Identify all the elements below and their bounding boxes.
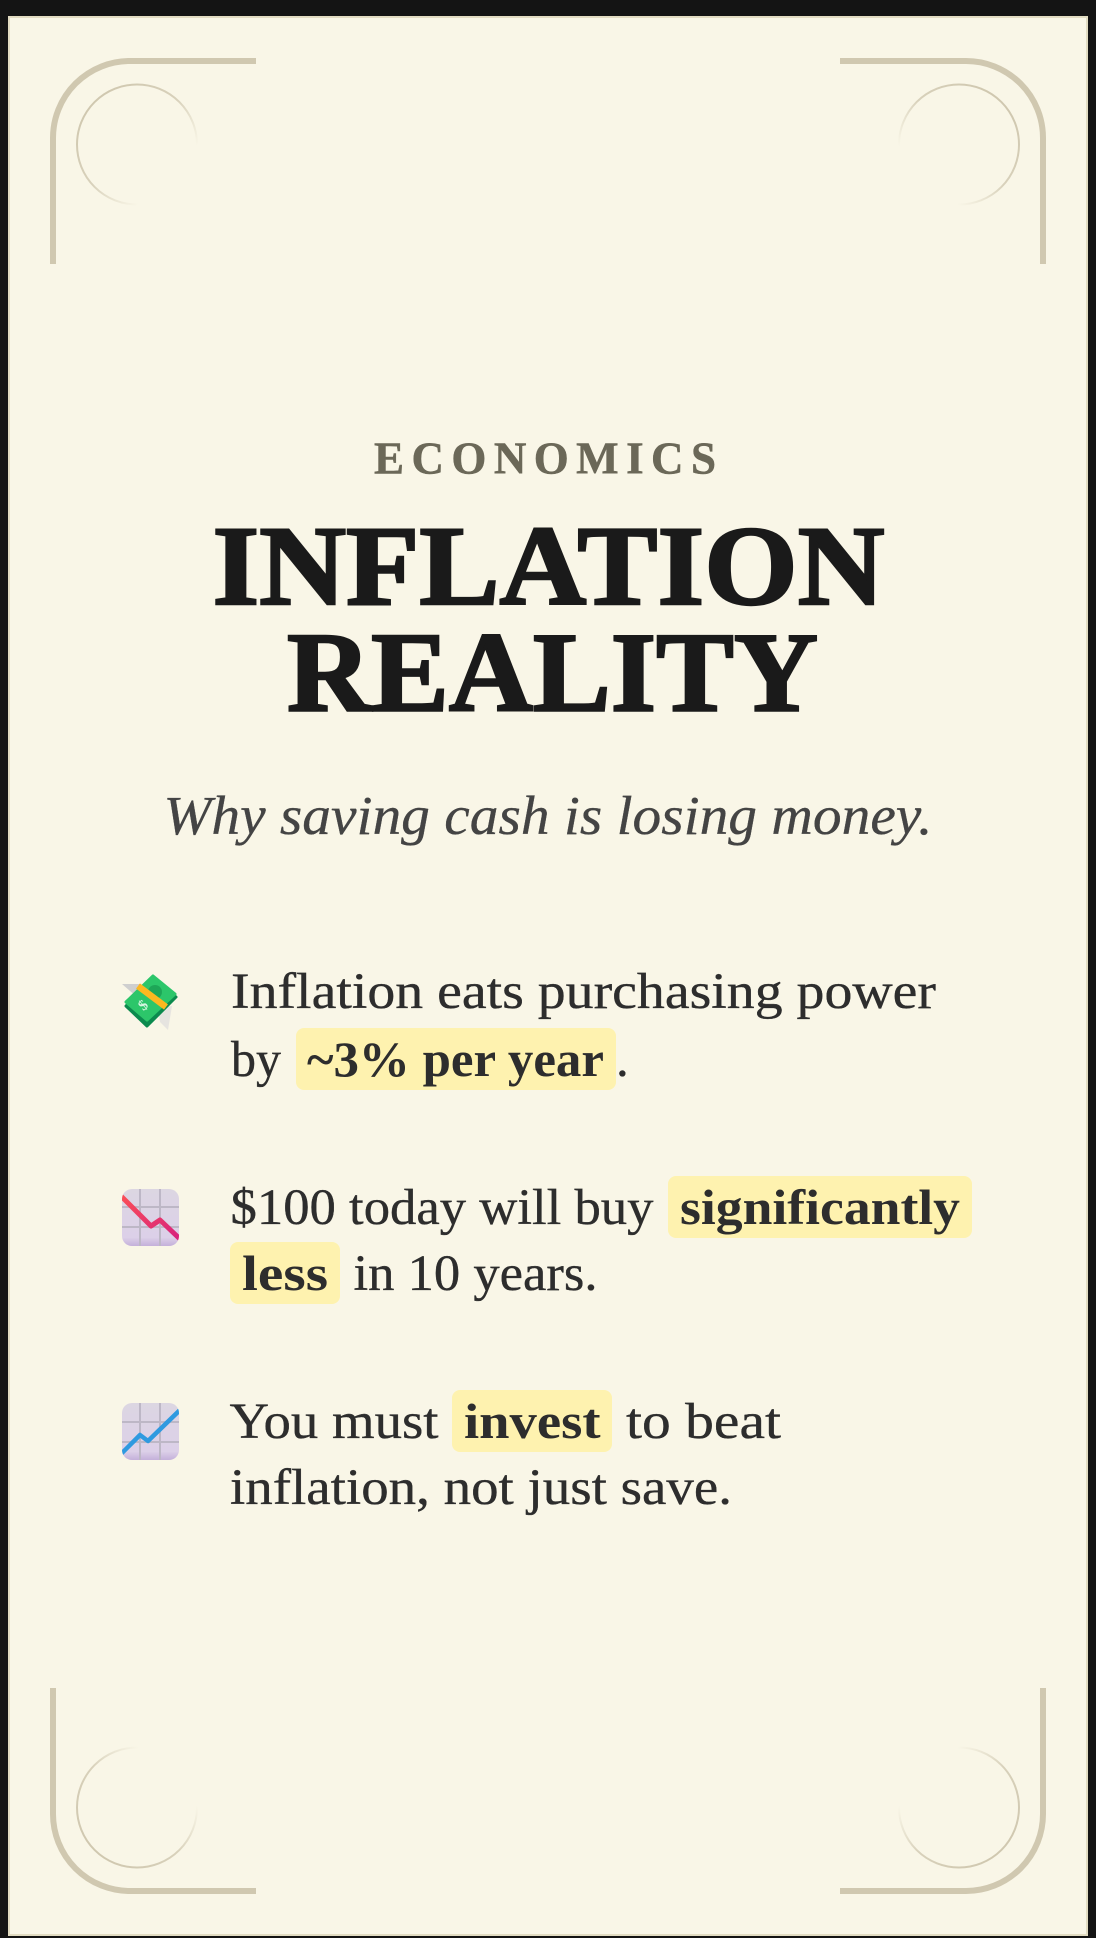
corner ornament: top right bbox=[840, 61, 1043, 264]
title: INFLATION bbox=[212, 504, 884, 629]
corner ornament: top left bbox=[53, 61, 256, 264]
item 1: purchasing power: by bbox=[231, 1032, 281, 1088]
highlight: 3% per year: ~3% per year bbox=[307, 1031, 604, 1087]
subtitle: Why saving cash is losing money. bbox=[164, 785, 932, 846]
item 1: purchasing power: . bbox=[616, 1032, 629, 1088]
item 3: invest: to beat bbox=[626, 1394, 781, 1450]
corner ornament: bottom left bbox=[53, 1688, 256, 1891]
highlight: less bbox=[230, 1242, 340, 1304]
icon: money with wings bbox=[122, 976, 176, 1030]
highlight: significantly: significantly bbox=[680, 1179, 960, 1235]
corner ornament: bottom right bbox=[840, 1688, 1043, 1891]
item 2: future buying power: in 10 years. bbox=[354, 1246, 598, 1302]
icon: chart increasing bbox=[120, 1403, 181, 1460]
icon: money with wings: $ bbox=[136, 997, 152, 1014]
item 1: purchasing power bbox=[122, 964, 936, 1090]
line text: You must bbox=[230, 1394, 438, 1450]
icon: chart decreasing bbox=[120, 1189, 181, 1246]
item 2: future buying power bbox=[120, 1176, 972, 1304]
line text: $100 today will buy bbox=[230, 1180, 654, 1236]
line text: Inflation eats purchasing power bbox=[231, 964, 936, 1020]
highlight: invest: invest bbox=[464, 1393, 601, 1449]
item 3: invest bbox=[120, 1390, 781, 1516]
highlight: less: less bbox=[242, 1245, 328, 1301]
title bbox=[212, 504, 884, 736]
item 3: invest: inflation, not just save. bbox=[230, 1460, 732, 1516]
title: REALITY bbox=[287, 610, 818, 736]
eyebrow: economics: ECONOMICS bbox=[374, 434, 716, 484]
